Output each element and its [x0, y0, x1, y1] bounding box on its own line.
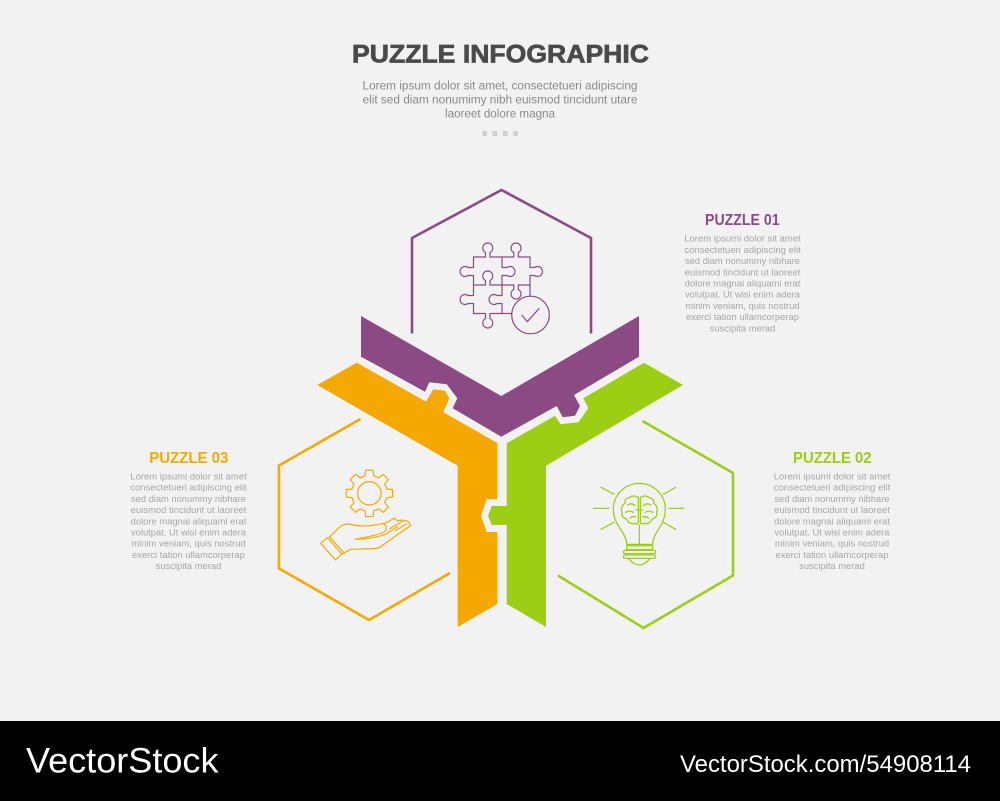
body: puzzle 03: consectetueri adipiscing elit [130, 483, 247, 494]
title dots [482, 131, 518, 136]
body: puzzle 02: suscipita merad [799, 561, 865, 572]
body: puzzle 02: dolore magnai aliquami erat [774, 516, 890, 527]
footer band [0, 721, 1000, 801]
body: puzzle 02: minim veniam, quis nostrud [775, 539, 889, 550]
icon: light bulb with brain [593, 483, 684, 565]
body: puzzle 02: euismod tincidunt ut laoreet [774, 505, 890, 516]
body: puzzle 02 [774, 472, 891, 572]
body: puzzle 01: suscipita merad [710, 323, 775, 334]
intro text: laoreet dolore magna [445, 106, 555, 120]
heading: puzzle 01: PUZZLE 01 [705, 212, 780, 229]
body: puzzle 02: consectetueri adipiscing elit [774, 483, 891, 494]
body: puzzle 02: exerci tation ullamcorperap [776, 550, 888, 561]
body: puzzle 03: volutpat. Ut wisi enim adera [131, 528, 247, 538]
body: puzzle 03: dolore magnai aliquami erat [131, 516, 247, 527]
body: puzzle 01: volutpat. Ut wisi enim adera [685, 290, 801, 301]
body: puzzle 01: exerci tation ullamcorperap [686, 312, 799, 323]
intro text: elit sed diam nonumimy nibh euismod tincidunt utare [362, 92, 638, 106]
body: puzzle 03: minim veniam, quis nostrud [131, 539, 246, 550]
icon: puzzle pieces with check [460, 243, 549, 334]
title: PUZZLE INFOGRAPHIC [352, 40, 649, 68]
puzzle piece: green [488, 363, 683, 627]
hexagon outline: purple [412, 190, 591, 334]
body: puzzle 01: euismod tincidunt ut laoreet [685, 267, 801, 278]
hexagon outline: orange [279, 419, 450, 620]
body: puzzle 01: Lorem ipsumi dolor sit amet [684, 234, 801, 245]
body: puzzle 03: euismod tincidunt ut laoreet [131, 505, 247, 516]
footer logo: VectorStock [26, 741, 219, 780]
body: puzzle 02: volutpat. Ut wisi enim adera [774, 528, 890, 538]
text block: puzzle 01 [684, 212, 801, 334]
hexagon outline: green [558, 421, 733, 628]
text block: puzzle 03 [130, 450, 247, 572]
body: puzzle 01 [684, 234, 801, 334]
body: puzzle 02: sed diam nonummy nibhare [774, 494, 890, 505]
puzzle piece: purple [361, 316, 639, 437]
body: puzzle 01: consectetueri adipiscing elit [684, 245, 801, 256]
body: puzzle 03: Lorem ipsumi dolor sit amet [130, 472, 247, 482]
text block: puzzle 02 [774, 450, 891, 572]
intro text [362, 78, 638, 120]
body: puzzle 01: minim veniam, quis nostrud [685, 301, 800, 312]
body: puzzle 03 [130, 472, 247, 572]
body: puzzle 03: suscipita merad [156, 561, 221, 572]
intro text: Lorem ipsum dolor sit amet, consectetueri adipiscing [362, 78, 638, 92]
body: puzzle 03: sed diam nonummy nibhare [131, 494, 246, 505]
puzzle piece: orange [317, 363, 497, 627]
body: puzzle 02: Lorem ipsumi dolor sit amet [774, 472, 891, 482]
icon: gear and hand [321, 470, 411, 560]
body: puzzle 03: exerci tation ullamcorperap [132, 550, 245, 561]
heading: puzzle 02: PUZZLE 02 [793, 450, 872, 467]
heading: puzzle 03: PUZZLE 03 [149, 450, 229, 467]
body: puzzle 01: sed diam nonummy nibhare [685, 256, 800, 267]
footer url: VectorStock.com/54908114 [680, 751, 971, 778]
body: puzzle 01: dolore magnai aliquami erat [685, 278, 801, 290]
